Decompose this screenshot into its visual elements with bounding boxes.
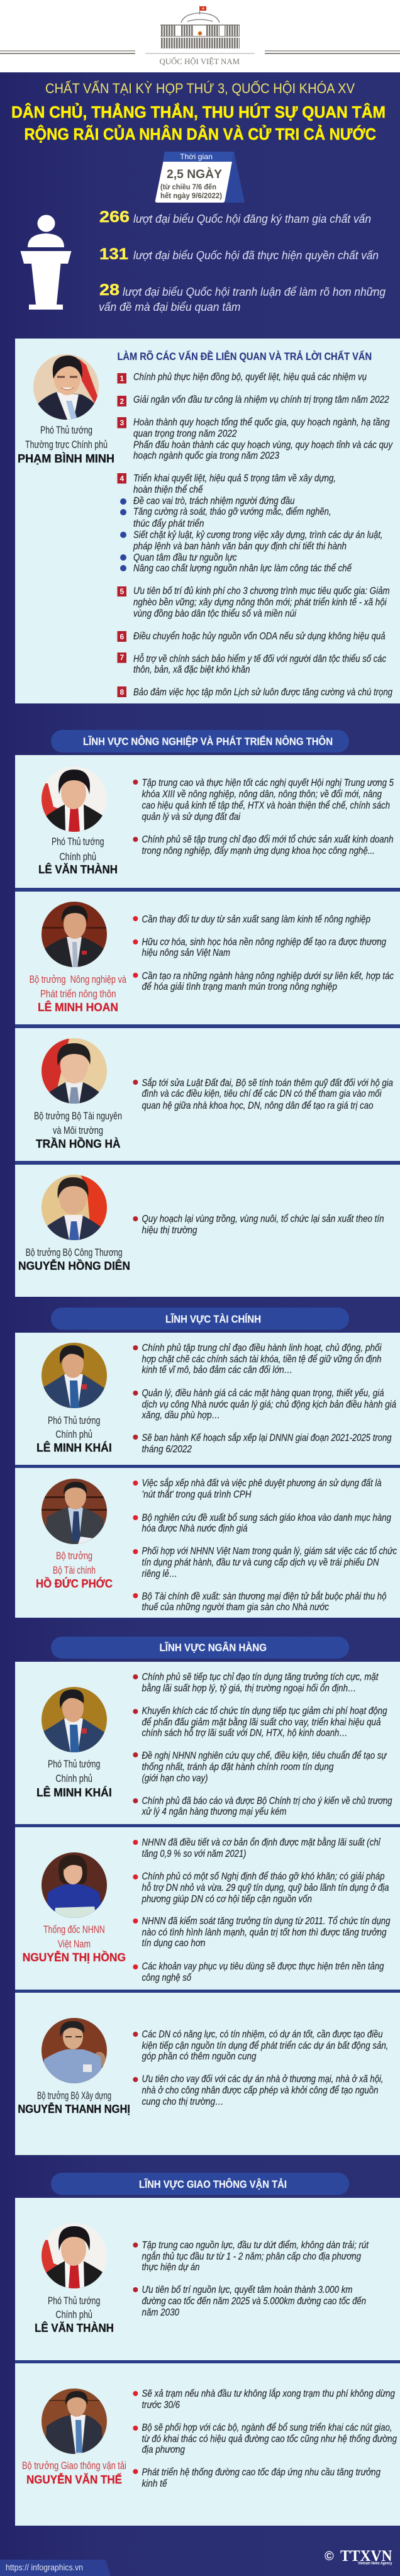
bullet: kinh tế vĩ mô, bảo đảm các cân đối lớn… <box>142 1365 292 1375</box>
bullet <box>133 2387 395 2411</box>
caption: Lê Minh Hoan <box>30 973 126 1014</box>
section heading: finance: LĨNH VỰC TÀI CHÍNH <box>165 1313 261 1325</box>
caption: Trần Hồng Hà: và Môi trường <box>53 1124 103 1136</box>
item 7: 7 <box>119 653 125 662</box>
item 4: Tăng cường rà soát, tháo gỡ vướng mắc, điểm nghẽn, <box>133 505 331 517</box>
caption: Lê Văn Thành: Chính phủ <box>55 2309 92 2321</box>
bullet <box>133 2239 369 2273</box>
caption: Trần Hồng Hà: TRẦN HỒNG HÀ <box>36 1137 121 1150</box>
bullet <box>133 1545 397 1579</box>
item 3: hoạch ngành quốc gia trong năm 2023 <box>133 451 279 461</box>
stat: 28: lượt đại biểu Quốc hội tranh luận để làm rõ hơn những <box>123 286 386 298</box>
bullet <box>133 834 394 856</box>
caption: Lê Văn Thành: Phó Thủ tướng <box>52 836 104 848</box>
bullet: địa phương <box>142 2444 185 2455</box>
item 4: pháp lệnh và ban hành văn bản quy định chi tiết thi hành <box>133 541 347 552</box>
divider <box>15 2360 400 2363</box>
bullet <box>133 1836 381 1859</box>
section heading: agriculture: LĨNH VỰC NÔNG NGHIỆP VÀ PHÁT TRIỂN NÔNG THÔN <box>83 735 333 748</box>
bullet <box>133 1213 384 1236</box>
item 4: Quan tâm đầu tư nguồn lực <box>133 552 236 563</box>
bullet: tín dụng cao hơn <box>142 1938 206 1949</box>
logo caption: QUỐC HỘI VIỆT NAM <box>160 57 240 66</box>
item 1: 1 <box>119 374 125 383</box>
divider <box>15 1824 400 1827</box>
portrait: Lê Minh Khái <box>42 1343 107 1408</box>
portrait: Lê Minh Khái <box>42 1687 107 1752</box>
panel: Nguyễn Hồng Diên <box>15 1165 400 1297</box>
title block: RỘNG RÃI CỦA NHÂN DÂN VÀ CỬ TRI CẢ NƯỚC <box>24 124 376 143</box>
section heading: finance <box>51 1308 349 1330</box>
bullet <box>133 1672 379 1694</box>
item 4 <box>117 473 382 574</box>
bullet <box>133 1915 391 1949</box>
caption: Hồ Đức Phớc: Bộ trưởng <box>56 1550 92 1562</box>
item 4: hoàn thiện thể chế <box>133 484 203 495</box>
footer: website tab <box>0 2560 111 2576</box>
title block: CHẤT VẤN TẠI KỲ HỌP THỨ 3, QUỐC HỘI KHÓA XV <box>45 80 355 96</box>
caption: Nguyễn Thị Hồng: NGUYỄN THỊ HỒNG <box>23 1951 126 1964</box>
stat: 266 <box>99 208 371 226</box>
bullet <box>133 2285 366 2318</box>
caption: Hồ Đức Phớc <box>36 1550 113 1590</box>
bullet: bằng lãi suất hợp lý, tỷ giá, thị trường ngoại hối ổn định… <box>142 1682 356 1694</box>
caption: Phạm Bình Minh: PHẠM BÌNH MINH <box>18 452 114 465</box>
section heading: transport <box>51 2173 349 2195</box>
bullet: (giới hạn cho vay) <box>142 1773 208 1784</box>
calendar: duration <box>155 152 245 203</box>
calendar: duration: Thời gian <box>180 152 213 161</box>
portrait: Lê Minh Hoan <box>42 902 107 967</box>
bullet: để hóa giải tình trạng manh mún trong nông nghiệp <box>142 981 337 992</box>
bullet: góp phần có thêm nguồn cung <box>142 2051 257 2062</box>
portrait: Phạm Bình Minh <box>33 354 99 420</box>
caption: Lê Văn Thành <box>38 836 118 876</box>
bullet <box>133 778 394 822</box>
title block <box>11 80 386 143</box>
bullet: 'nút thắt' trong quá trình CPH <box>142 1488 252 1500</box>
item 6: 6 <box>119 632 125 641</box>
divider <box>15 1161 400 1165</box>
panel: Nguyễn Thị Hồng <box>15 1827 400 1990</box>
item 2: 2 <box>119 397 125 406</box>
bullet <box>133 1961 384 1983</box>
section heading: banking: LĨNH VỰC NGÂN HÀNG <box>160 1641 267 1654</box>
title block: DÂN CHỦ, THẲNG THẮN, THU HÚT SỰ QUAN TÂM <box>11 102 386 121</box>
stat: 131 <box>99 245 379 263</box>
item 3: quan trọng trong năm 2022 <box>133 428 237 439</box>
stat: 266: lượt đại biểu Quốc hội đăng ký tham gia chất vấn <box>133 213 371 225</box>
bullet: chính sách hỗ trợ lãi suất với DN, HTX, hộ kinh doanh… <box>142 1727 347 1739</box>
calendar: duration: (từ chiều 7/6 đến <box>160 184 216 191</box>
bullet <box>133 2029 389 2062</box>
bullet <box>133 2074 384 2107</box>
bullet <box>133 1750 387 1784</box>
header: National Assembly logo <box>0 0 400 72</box>
bullet: hiệu nông sản Việt Nam <box>142 948 230 958</box>
calendar: duration: hết ngày 9/6/2022) <box>160 193 222 200</box>
bullet: năm 2030 <box>142 2307 179 2318</box>
section heading: transport: LĨNH VỰC GIAO THÔNG VẬN TẢI <box>139 2178 287 2190</box>
bullet <box>133 1477 382 1500</box>
portrait: Trần Hồng Hà <box>42 1038 107 1104</box>
bullet: quản lý và sử dụng đất đai <box>142 812 240 822</box>
bullet: Ưu tiên bố trí nguồn lực, quyết tâm hoàn thành 3.000 km <box>142 2285 352 2295</box>
caption: Lê Minh Khái <box>36 1414 112 1454</box>
divider <box>15 1990 400 1993</box>
caption: Lê Minh Khái: Phó Thủ tướng <box>48 1758 100 1770</box>
footer: website tab: https:// infographics.vn <box>6 2562 83 2572</box>
bullet <box>133 936 386 958</box>
panel: Trần Hồng Hà <box>15 1028 400 1161</box>
bullet: cung cho thị trường… <box>142 2097 224 2107</box>
portrait: Nguyễn Thanh Nghị <box>42 2018 107 2083</box>
item 5: vùng đồng bào dân tộc thiểu số và miền núi <box>133 608 296 619</box>
portrait: Nguyễn Văn Thể <box>42 2388 107 2454</box>
item 4: 4 <box>119 474 125 483</box>
item 7: thôn, bản, xã đặc biệt khó khăn <box>133 664 250 675</box>
section heading: agriculture <box>51 730 349 753</box>
caption: Lê Văn Thành: LÊ VĂN THÀNH <box>35 2321 114 2334</box>
bullet: hóa được Nhà nước định giá <box>142 1523 248 1534</box>
portrait: Hồ Đức Phớc <box>42 1479 107 1544</box>
bullet: ngắn thủ tục đầu tư từ 1 - 2 năm; phân cấp cho địa phương <box>142 2250 361 2262</box>
item 4: Đề cao vai trò, trách nhiệm người đứng đầu <box>133 496 295 507</box>
bullet <box>133 2467 381 2489</box>
panel: Lê Minh Hoan <box>15 892 400 1024</box>
logo: TTXVN: TTXVN <box>340 2548 392 2565</box>
caption: Hồ Đức Phớc: Bộ Tài chính <box>53 1564 96 1576</box>
divider <box>15 1465 400 1468</box>
bullet <box>133 1388 396 1421</box>
bullet <box>133 1796 392 1817</box>
item 3 <box>117 417 393 461</box>
panel: Phạm Bình Minh <box>15 339 400 703</box>
caption: Lê Minh Hoan: Phát triển nông thôn <box>40 988 116 1000</box>
caption: Nguyễn Hồng Diên <box>18 1246 130 1272</box>
panel: Nguyễn Thanh Nghị <box>15 1993 400 2155</box>
bullet: phương giúp DN có cơ hội tiếp cận nguồn vốn <box>142 1894 312 1905</box>
caption: Lê Văn Thành: Chính phủ <box>59 851 96 863</box>
bullet: tháng 6/2022 <box>142 1444 192 1455</box>
stat: 28: 28 <box>99 281 119 299</box>
item 5 <box>117 586 390 619</box>
item 5: 5 <box>119 587 125 596</box>
logo: TTXVN: Vietnam News Agency <box>358 2562 392 2566</box>
bullet: thực hiện dự án <box>142 2262 200 2273</box>
stat: 28 <box>99 281 386 313</box>
bullet <box>133 1590 387 1613</box>
item 8: 8 <box>119 688 125 697</box>
bullet: trước 30/6 <box>142 2400 180 2411</box>
item 7 <box>117 652 386 675</box>
caption: Nguyễn Thị Hồng <box>23 1924 126 1964</box>
caption: Lê Minh Hoan: Bộ trưởng Nông nghiệp và <box>30 973 126 985</box>
portrait: Nguyễn Thị Hồng <box>42 1852 107 1918</box>
caption: Lê Văn Thành <box>35 2295 114 2334</box>
caption: Lê Minh Khái: Chính phủ <box>55 1772 92 1784</box>
caption: Lê Minh Khái: Phó Thủ tướng <box>48 1414 100 1426</box>
bullet: thống nhất, tránh áp đặt hành chính room tín dụng <box>142 1762 334 1772</box>
caption: Phạm Bình Minh: Thường trực Chính phủ <box>25 439 108 451</box>
bullet <box>133 971 394 992</box>
caption: Nguyễn Văn Thể <box>22 2460 126 2486</box>
caption: Nguyễn Thanh Nghị: Bộ trưởng Bộ Xây dựng <box>37 2090 111 2102</box>
caption: Lê Minh Khái: LÊ MINH KHÁI <box>36 1786 112 1799</box>
bullet <box>133 1343 382 1375</box>
caption: Lê Minh Khái <box>36 1758 112 1799</box>
divider <box>15 1024 400 1028</box>
caption: Nguyễn Thanh Nghị: NGUYỄN THANH NGHỊ <box>18 2102 130 2115</box>
panel: Lê Minh Khái (banking) <box>15 1662 400 1824</box>
stat: 266: 266 <box>99 208 130 226</box>
portrait: Lê Văn Thành <box>42 766 107 832</box>
caption: Nguyễn Hồng Diên: Bộ trưởng Bộ Công Thương <box>26 1246 123 1258</box>
caption: Phạm Bình Minh: Phó Thủ tướng <box>40 424 92 436</box>
item 4: Triển khai quyết liệt, hiệu quả 5 trọng tâm về xây dựng, <box>133 473 336 484</box>
stat: 131: 131 <box>99 245 128 263</box>
portrait: Lê Văn Thành <box>42 2223 107 2288</box>
caption: Lê Văn Thành: LÊ VĂN THÀNH <box>38 863 118 876</box>
caption: Lê Minh Khái: Chính phủ <box>55 1428 92 1440</box>
bullet: công nghệ số <box>142 1973 192 1983</box>
bullet: xăng, dầu phù hợp… <box>142 1410 220 1421</box>
bullet: xử lý 4 ngân hàng thương mại yếu kém <box>142 1806 287 1817</box>
bullet: riêng lẻ… <box>142 1569 177 1579</box>
panel: Lê Minh Khái (finance) <box>15 1333 400 1465</box>
calendar: duration: 2,5 NGÀY <box>167 167 222 181</box>
bullet: kinh tế <box>142 2478 167 2489</box>
caption: Lê Minh Khái: LÊ MINH KHÁI <box>36 1441 112 1454</box>
bullet: hiệu thị trường <box>142 1225 197 1236</box>
stat: 28: vấn đề mà đại biểu quan tâm <box>99 301 241 313</box>
bullet: tăng 0,9 % so với năm 2021) <box>142 1849 247 1859</box>
section heading: banking <box>51 1637 349 1659</box>
icon: parliament building <box>160 6 240 48</box>
bullet <box>133 1077 393 1111</box>
caption: Trần Hồng Hà: Bộ trưởng Bộ Tài nguyên <box>34 1110 122 1122</box>
caption: Nguyễn Thị Hồng: Việt Nam <box>58 1938 91 1950</box>
caption: Nguyễn Thanh Nghị <box>18 2090 130 2115</box>
caption: Phạm Bình Minh <box>18 424 114 465</box>
panel: Hồ Đức Phớc <box>15 1468 400 1618</box>
item 4: thúc đẩy phát triển <box>133 518 204 529</box>
bullet <box>133 1431 392 1455</box>
panel: Lê Văn Thành (transport) <box>15 2198 400 2360</box>
bullet <box>133 2422 397 2455</box>
bullet <box>133 1512 391 1534</box>
bullet <box>133 1871 389 1905</box>
stat: 131: lượt đại biểu Quốc hội đã thực hiện quyền chất vấn <box>133 249 379 262</box>
bullet <box>133 1705 387 1739</box>
caption: Nguyễn Văn Thể: Bộ trưởng Giao thông vận tải <box>22 2460 126 2472</box>
panel: Nguyễn Văn Thể <box>15 2363 400 2526</box>
caption: Nguyễn Thị Hồng: Thống đốc NHNN <box>43 1924 105 1935</box>
panel: Lê Văn Thành (agriculture) <box>15 755 400 888</box>
icon: speaker at podium <box>20 215 72 310</box>
logo: TTXVN: © <box>325 2550 334 2563</box>
caption: Nguyễn Hồng Diên: NGUYỄN HỒNG DIÊN <box>18 1259 130 1272</box>
caption: Lê Văn Thành: Phó Thủ tướng <box>48 2295 100 2307</box>
item 3: 3 <box>119 418 125 427</box>
caption: Lê Minh Hoan: LÊ MINH HOAN <box>38 1000 118 1014</box>
item 4: Nâng cao chất lượng nguồn nhân lực làm công tác thể chế <box>133 563 352 574</box>
bullet: thuế của những người tham gia sàn cho Nhà nước <box>142 1602 329 1613</box>
caption: Nguyễn Văn Thể: NGUYỄN VĂN THẾ <box>26 2473 122 2486</box>
caption: Trần Hồng Hà <box>34 1110 122 1150</box>
portrait: Nguyễn Hồng Diên <box>42 1175 107 1240</box>
divider <box>15 888 400 892</box>
caption: Hồ Đức Phớc: HỒ ĐỨC PHỚC <box>36 1577 113 1590</box>
